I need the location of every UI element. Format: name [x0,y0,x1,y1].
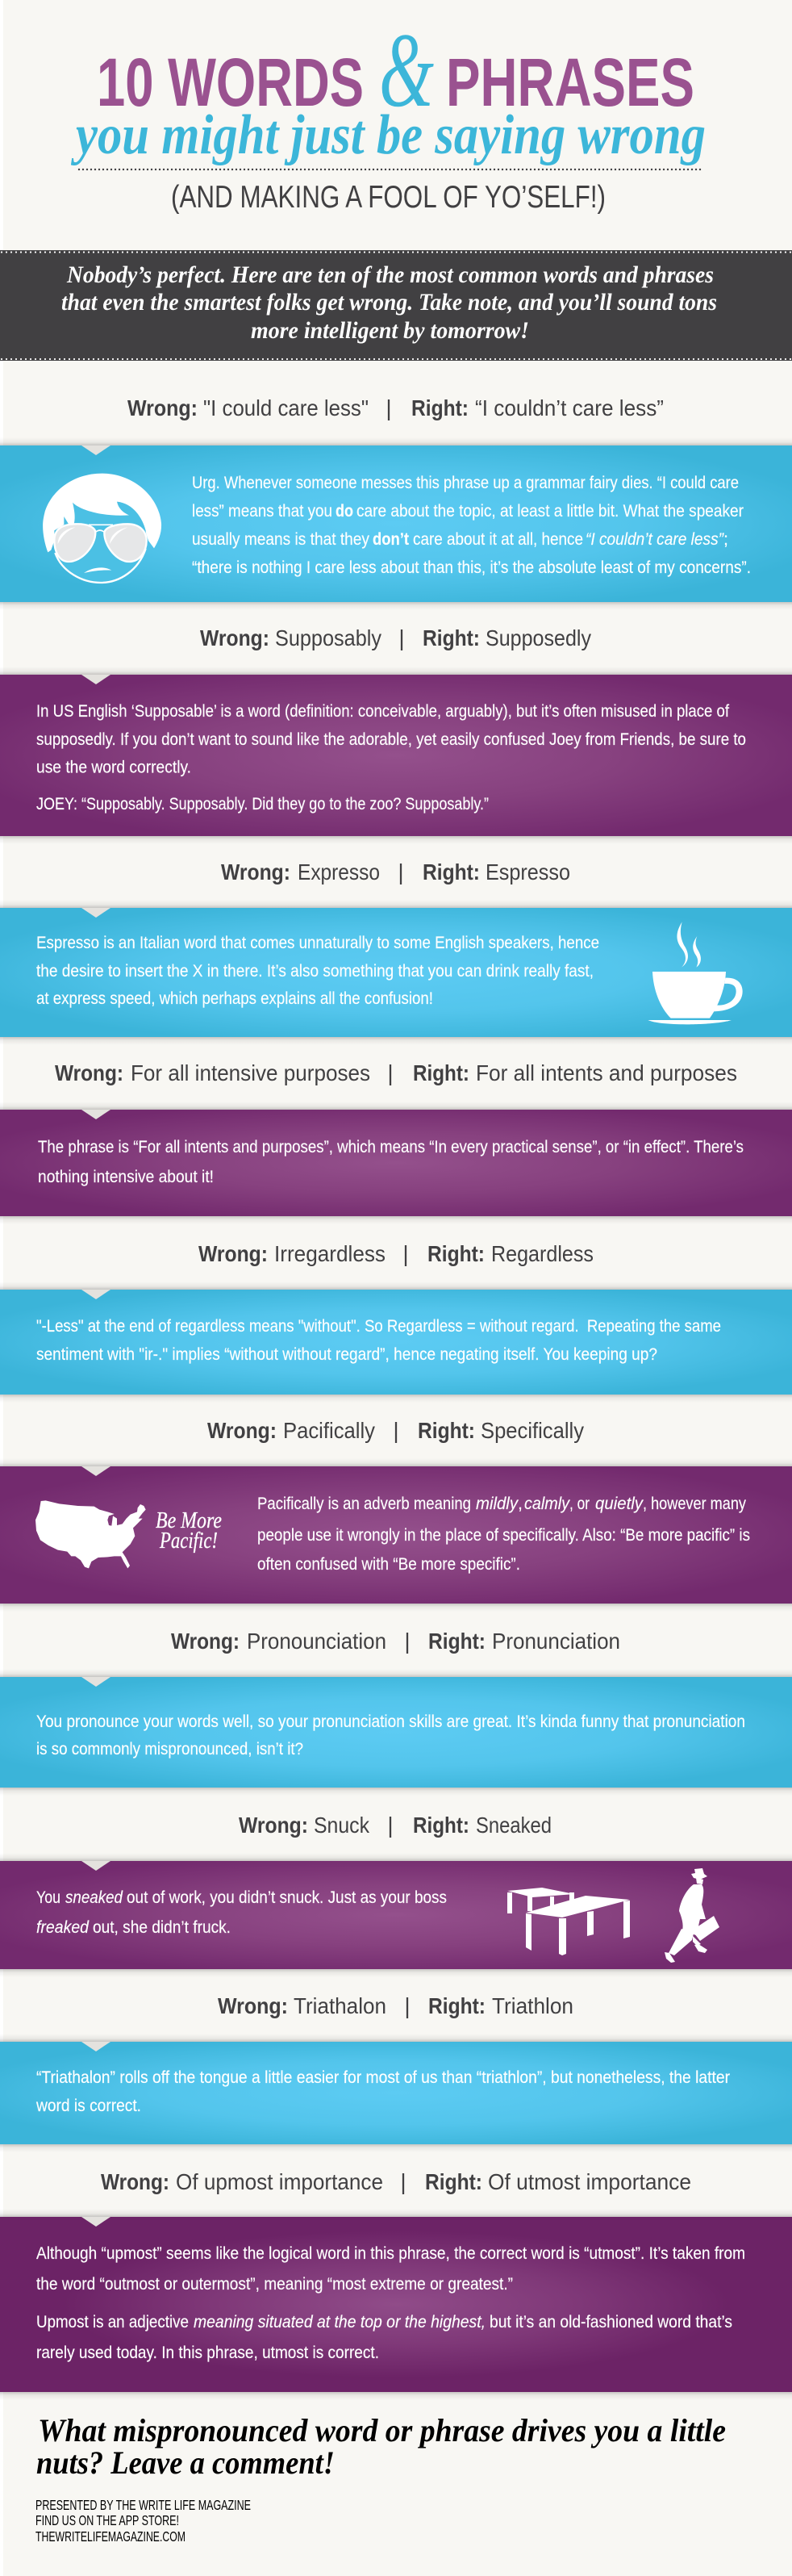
panel 2 text: use the word correctly. [36,757,191,776]
panel 8 text: sneaked [65,1888,123,1907]
heading 8: Right: [413,1813,469,1838]
panel 7 text: is so commonly mispronounced, isn’t it? [36,1739,303,1758]
heading 5: Wrong: [198,1241,268,1266]
heading 1: "I could care less" [203,395,369,420]
panel 8 text: You [36,1888,60,1907]
icon: desks [507,1888,630,1955]
heading 8 [239,1813,552,1838]
heading 2: Wrong: [200,625,269,650]
panel 10 text: Upmost is an adjective [36,2312,189,2331]
heading 6: | [393,1418,399,1443]
panel 1 text: care about it at all, hence [413,529,583,549]
panel 6 text [257,1494,750,1574]
map caption: Pacific! [159,1528,218,1554]
panel 3 text: at express speed, which perhaps explains all the confusion! [36,989,433,1008]
panel 7: pronunciation [0,1669,792,1796]
heading 4 [55,1060,737,1085]
heading 10: Of utmost importance [488,2169,691,2194]
heading 10 [101,2169,691,2194]
panel 3 text [36,933,599,1008]
title: 10 WORDS [97,44,364,120]
intro text: that even the smartest folks get wrong. Take note, and you’ll sound tons [61,289,717,316]
panel 6 text: Pacifically is an adverb meaning [257,1494,471,1513]
panel: intro band [0,250,792,361]
heading 5 [198,1241,594,1266]
heading 6: Wrong: [207,1418,277,1443]
heading 4: For all intents and purposes [476,1060,737,1085]
icon: usa map [35,1500,146,1568]
closing question: What mispronounced word or phrase drives you a little [38,2412,726,2448]
subtitle: and making a fool: (AND MAKING A FOOL OF YO’SELF!) [171,180,606,215]
panel 6 text: often confused with “Be more specific”. [257,1554,520,1574]
panel 10 text: meaning situated at the top or the highest, [194,2312,486,2331]
heading 4: For all intensive purposes [131,1060,370,1085]
heading 1: Right: [411,395,469,420]
heading 7: Pronunciation [492,1629,620,1654]
heading 8: Snuck [314,1813,370,1838]
heading 3: Wrong: [221,859,290,884]
panel 3: espresso [0,900,792,1045]
panel 5: regardless [0,1282,792,1403]
panel 6: specifically [0,1458,792,1612]
panel 1 text: care about the topic, at least a little bit. What the speaker [356,501,744,521]
panel 2 text: JOEY: “Supposably. Supposably. Did they go to the zoo? Supposably.” [36,794,489,813]
title: PHRASES [446,44,694,120]
panel 10 text: the word “outmost or outermost”, meaning “most extreme or greatest.” [36,2274,513,2294]
panel 9 text: word is correct. [35,2096,141,2115]
subtitle: you might just be saying wrong: you might just be saying wrong [71,104,706,166]
heading 1: Wrong: [127,395,198,420]
heading 4: Wrong: [55,1060,123,1085]
heading 8: Wrong: [239,1813,308,1838]
panel 2 text [36,701,746,813]
panel 3 text: Espresso is an Italian word that comes unnaturally to some English speakers, hence [36,933,599,952]
heading 2: Supposably [275,625,381,650]
heading 9: Right: [428,1993,486,2018]
heading 7: | [404,1629,411,1654]
heading 10: Of upmost importance [176,2169,383,2194]
heading 6: Pacifically [283,1418,375,1443]
heading 3: Espresso [486,859,570,884]
closing question [36,2412,726,2481]
heading 7 [171,1629,620,1654]
icon: man walking with briefcase [665,1868,719,1963]
panel 3 text: the desire to insert the X in there. It’s also something that you can drink really fast, [36,961,594,981]
panel 6 text: , however many [643,1494,746,1513]
panel 4 text [38,1137,744,1186]
heading 7: Right: [428,1629,486,1654]
panel 6 text: , or [569,1494,590,1513]
panel 8 text: out of work, you didn’t snuck. Just as your boss [127,1888,447,1907]
title [97,10,694,129]
intro text: Nobody’s perfect. Here are ten of the most common words and phrases [66,261,714,288]
heading 10: | [400,2169,406,2194]
panel 1 text [192,473,751,577]
panel 10 text: rarely used today. In this phrase, utmost is correct. [36,2343,379,2362]
panel 1 text: usually means is that they [192,529,369,549]
footer credits [35,2497,251,2545]
heading 8: | [387,1813,394,1838]
heading 5: Regardless [491,1241,594,1266]
heading 6: Specifically [481,1418,584,1443]
heading 2: Supposedly [486,625,591,650]
panel 9 text [35,2068,730,2115]
heading 9: Triathalon [294,1993,386,2018]
heading 2: | [398,625,405,650]
heading 7: Pronounciation [247,1629,386,1654]
footer credits: FIND US ON THE APP STORE! [35,2512,179,2528]
panel 6 text: , [518,1494,523,1513]
heading 3: Right: [423,859,480,884]
panel 7 text [36,1712,745,1758]
heading 3: | [398,859,404,884]
heading 4: Right: [413,1060,469,1085]
heading 1: “I couldn’t care less” [475,395,664,420]
panel 8: sneaked [0,1853,792,1977]
panel 10: utmost [0,2209,792,2400]
heading 4: | [387,1060,394,1085]
panel 8 text: freaked [36,1917,90,1937]
panel 8 text [36,1888,447,1937]
panel 9: triathlon [0,2034,792,2152]
heading 10: Wrong: [101,2169,169,2194]
heading 6: Right: [418,1418,475,1443]
panel 4 text: nothing intensive about it! [38,1167,214,1186]
heading 5: Right: [427,1241,485,1266]
heading 9: Wrong: [218,1993,288,2018]
heading 9: Triathlon [492,1993,573,2018]
heading 2 [200,625,591,650]
heading 1 [127,395,664,420]
heading 3 [221,859,570,884]
panel 1 text: don’t [373,529,409,549]
panel 1 text: less” means that you [192,501,332,521]
icon: face with aviator sunglasses [43,474,161,583]
heading 7: Wrong: [171,1629,240,1654]
heading 9 [218,1993,573,2018]
closing question: nuts? Leave a comment! [36,2444,335,2481]
panel 10 text [36,2244,745,2362]
heading 6 [207,1418,584,1443]
intro text [61,261,717,344]
ampersand: & [379,10,434,129]
panel 10 text: but it’s an old-fashioned word that’s [490,2312,732,2331]
footer credits: PRESENTED BY THE WRITE LIFE MAGAZINE [35,2497,251,2513]
heading 1: | [386,395,392,420]
panel 9 text: “Triathalon” rolls off the tongue a little easier for most of us than “triathlon”, but nonetheless, the latter [36,2068,730,2087]
panel 8 text: out, she didn’t fruck. [93,1917,231,1937]
panel 1 text: do [336,501,353,521]
panel 6 text: calmly [524,1494,570,1513]
heading 5: Irregardless [274,1241,386,1266]
intro text: more intelligent by tomorrow! [251,317,529,344]
panel 2: supposedly [0,667,792,844]
icon: coffee cup [648,922,743,1024]
panel 6 text: mildly [476,1494,519,1513]
footer credits: THEWRITELIFEMAGAZINE.COM [35,2528,185,2545]
panel 5 text [36,1316,721,1364]
heading 3: Expresso [298,859,380,884]
panel 4: intents and purposes [0,1102,792,1224]
panel 1 text: ; [723,529,728,549]
map caption [156,1508,222,1554]
heading 9: | [404,1993,411,2018]
map caption: Be More [156,1508,222,1533]
heading 5: | [402,1241,409,1266]
panel 1: could care less [0,437,792,610]
heading 10: Right: [425,2169,482,2194]
heading 8: Sneaked [476,1813,552,1838]
panel 1 text: “I couldn’t care less” [586,529,724,549]
panel 5 text: sentiment with "ir-." implies “without without regard”, hence negating itself. You keeping up? [36,1344,657,1364]
panel 6 text: quietly [595,1494,644,1513]
heading 2: Right: [423,625,480,650]
